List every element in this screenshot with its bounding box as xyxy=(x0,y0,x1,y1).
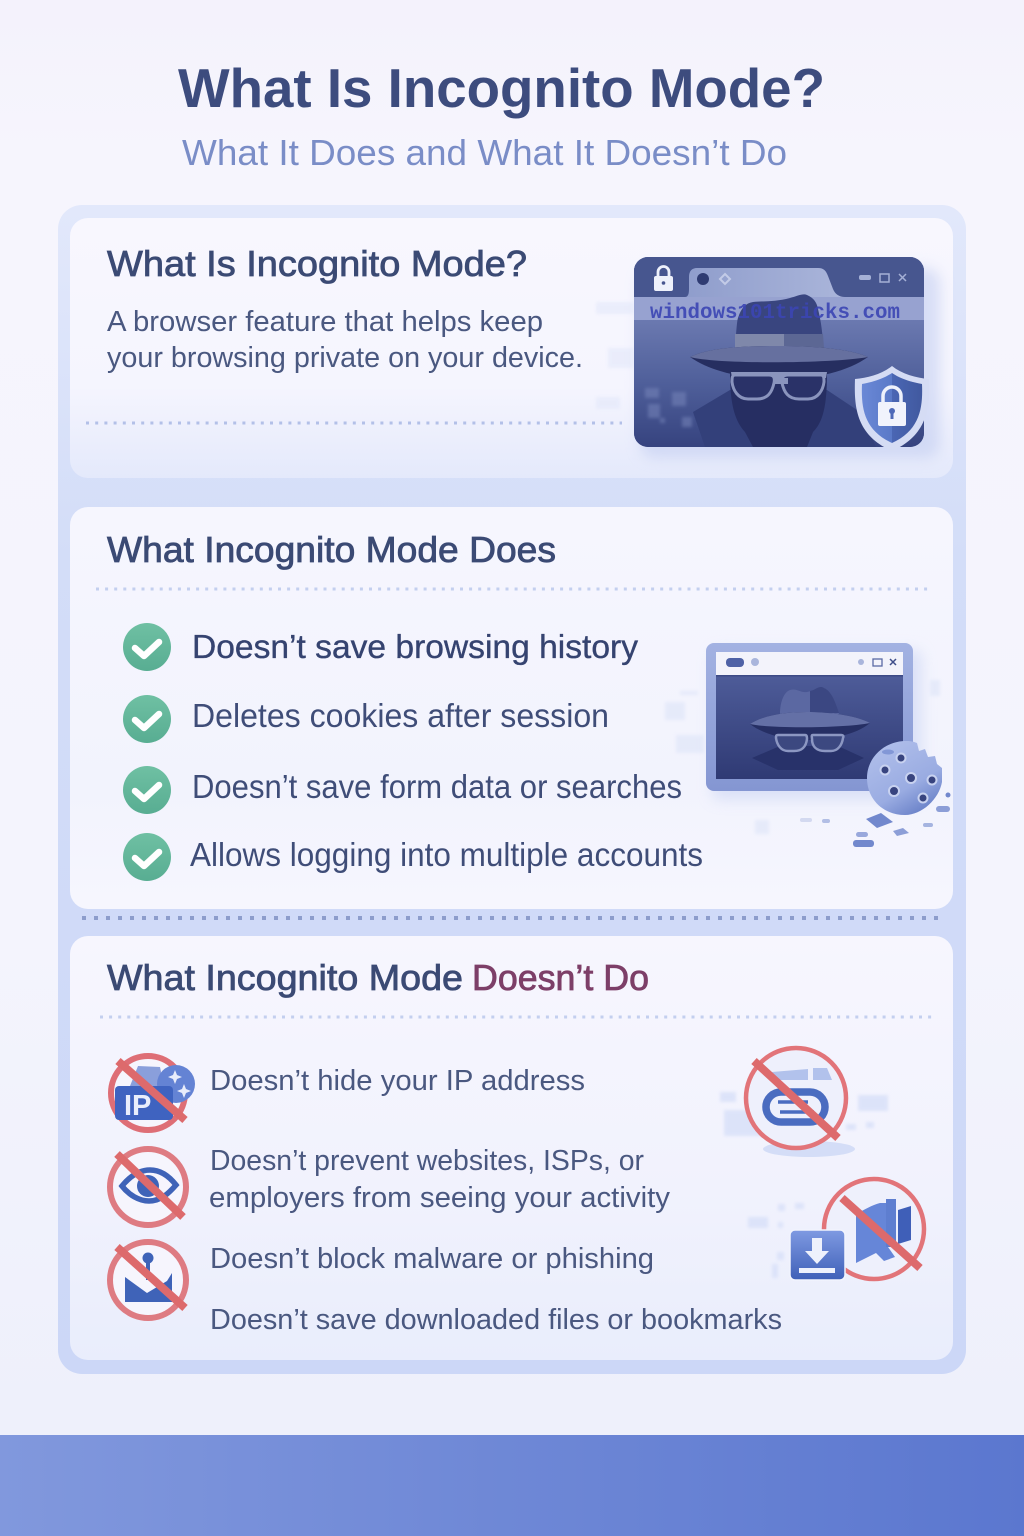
item: multiple accounts: Allows logging into multiple accounts xyxy=(190,836,703,873)
icon: no malware hook xyxy=(110,1242,186,1318)
description text: your browsing private on your device. xyxy=(107,342,583,374)
footer band xyxy=(0,1435,1024,1536)
illustration: no link xyxy=(720,1048,888,1157)
panel: what is incognito mode xyxy=(70,218,953,478)
icon: no IP xyxy=(111,1056,195,1130)
panel: what incognito mode does xyxy=(70,507,953,909)
icon: tab lock xyxy=(654,266,673,291)
text: IP address: Doesn’t hide your IP address xyxy=(210,1065,585,1097)
text: malware: Doesn’t block malware or phishing xyxy=(210,1243,654,1275)
icon: no eye xyxy=(110,1149,186,1225)
card background xyxy=(70,507,953,909)
illustration: browser and cookie xyxy=(665,643,950,847)
text: prevent websites: employers from seeing your activity xyxy=(209,1182,671,1214)
heading: what incognito mode doesn't do: Doesn’t Do xyxy=(472,957,649,998)
item: browsing history: Doesn’t save browsing history xyxy=(192,628,638,665)
card background xyxy=(70,936,953,1360)
item: form data xyxy=(123,766,682,814)
heading: what incognito mode doesn't do: What Incognito Mode xyxy=(107,957,463,998)
item: multiple accounts xyxy=(123,833,703,881)
icon: cookie xyxy=(867,741,942,815)
illustration: incognito browser xyxy=(596,257,940,458)
coat and face xyxy=(693,372,876,447)
heading: what incognito mode does: What Incognito Mode Does xyxy=(107,529,556,570)
panel: what incognito mode doesn't do xyxy=(70,936,953,1360)
text: downloads: Doesn’t save downloaded files or bookmarks xyxy=(210,1304,782,1336)
subtitle: What It Does and What It Doesn’t Do xyxy=(182,132,787,173)
item: form data: Doesn’t save form data or searches xyxy=(192,768,682,805)
item: browsing history xyxy=(123,623,638,671)
cookie crumbs xyxy=(800,792,950,847)
description text: A browser feature that helps keep xyxy=(107,306,543,338)
description text xyxy=(107,306,583,374)
title: What Is Incognito Mode? xyxy=(178,57,825,119)
illustration: no bookmark and download xyxy=(748,1179,924,1280)
item: cookies: Deletes cookies after session xyxy=(192,697,609,734)
divider dots between cards xyxy=(82,916,944,920)
heading: what is incognito mode: What Is Incognito Mode? xyxy=(107,243,527,284)
text: prevent websites xyxy=(209,1145,671,1214)
icon: no IP: IP xyxy=(124,1090,151,1122)
card background xyxy=(70,218,953,478)
check list xyxy=(123,623,703,881)
watermark: windows101tricks.com xyxy=(650,302,900,325)
browser controls xyxy=(697,273,906,285)
hat crown and brim xyxy=(690,294,868,379)
panel frame xyxy=(58,205,966,1374)
small hat figure xyxy=(750,687,870,770)
text: prevent websites: Doesn’t prevent websites, ISPs, or xyxy=(210,1145,644,1177)
item: cookies xyxy=(123,695,609,743)
sunglasses xyxy=(731,372,827,399)
icon: download box xyxy=(790,1230,845,1280)
icon: shield lock xyxy=(855,366,929,451)
